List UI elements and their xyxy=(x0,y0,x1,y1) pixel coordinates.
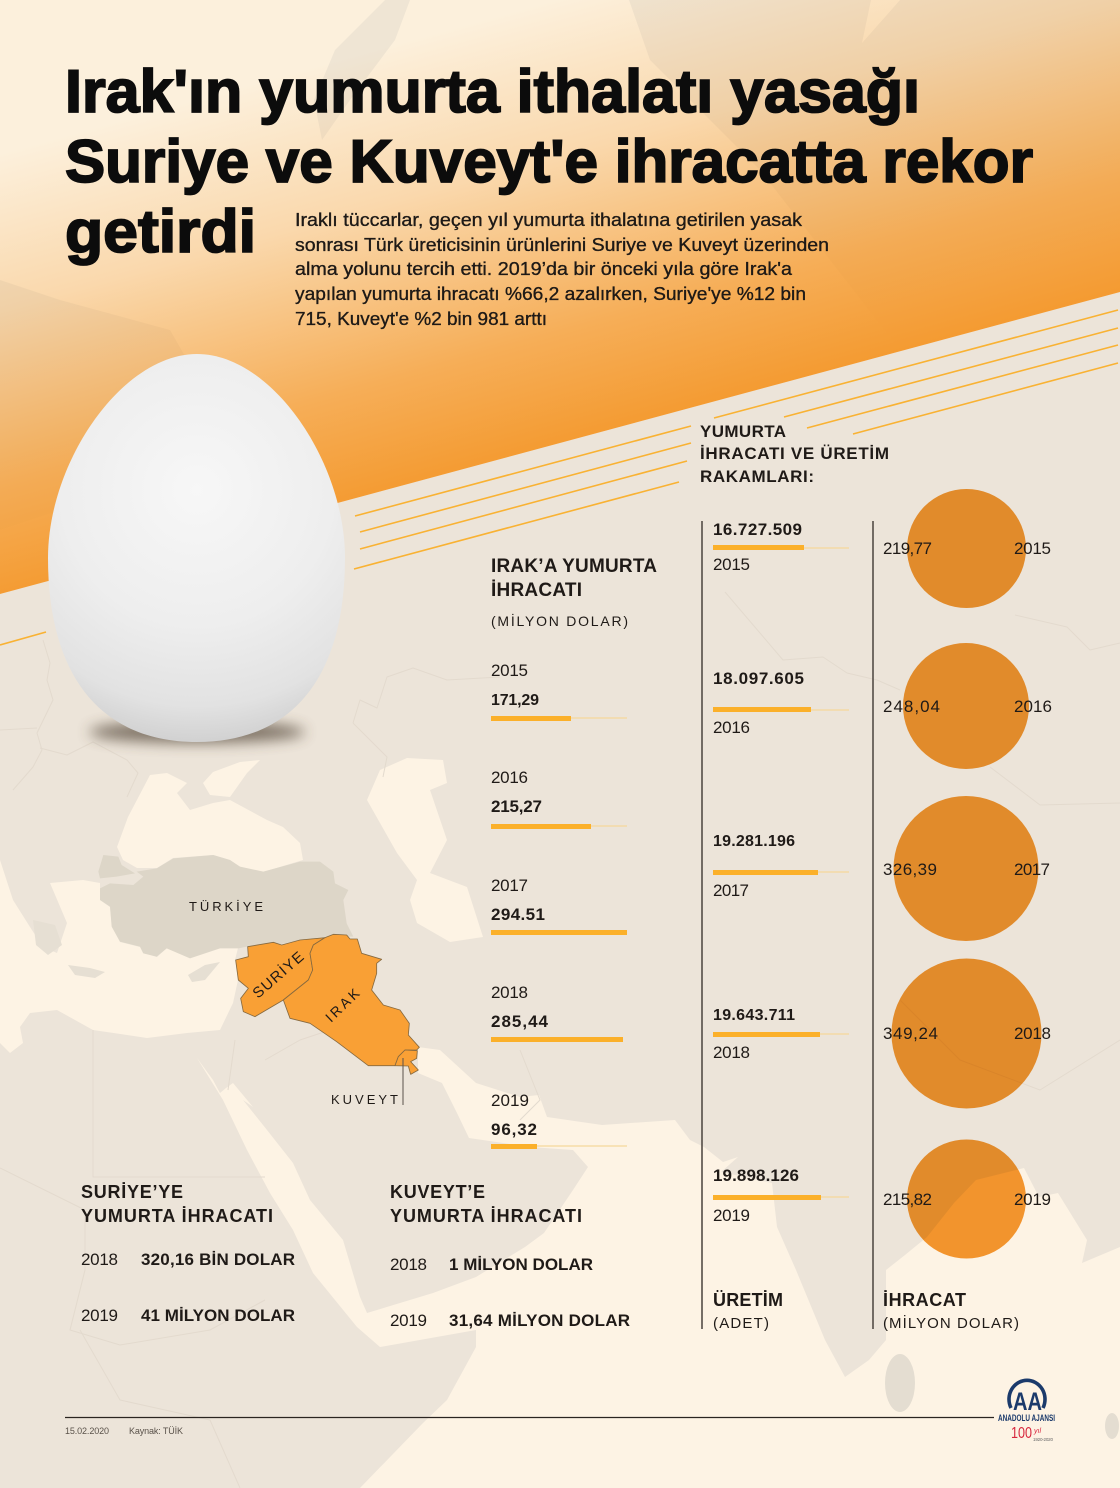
row 2016: 215,27 xyxy=(491,797,542,816)
logo: anadolu ajansi: yıl xyxy=(1033,1428,1041,1435)
production 2017: 19.281.196 xyxy=(713,833,795,850)
footer xyxy=(65,1418,994,1436)
export column labels xyxy=(883,539,1052,1332)
panel: exports to kuwait: 31,64 MİLYON DOLAR xyxy=(449,1311,630,1330)
section heading: export and production xyxy=(700,422,889,486)
sri lanka xyxy=(885,1354,915,1412)
production 2015: 16.727.509 xyxy=(713,520,802,539)
export column labels: (MİLYON DOLAR) xyxy=(883,1314,1019,1332)
section heading: export and production: İHRACATI VE ÜRETİM xyxy=(700,444,889,463)
row 2017: 2017 xyxy=(491,876,528,895)
panel: exports to syria xyxy=(81,1182,295,1325)
logo: anadolu ajansi xyxy=(998,1380,1055,1442)
production 2015 xyxy=(713,520,849,574)
seas xyxy=(0,758,1120,1488)
mediterranean xyxy=(0,860,238,1053)
export column labels: 2016 xyxy=(1014,697,1052,716)
intro text: yapılan yumurta ihracatı %66,2 azalırken, Suriye'ye %12 bin xyxy=(295,284,806,304)
production 2018 xyxy=(713,1007,849,1062)
row 2015: 171,29 xyxy=(491,692,539,709)
footer: Kaynak: TÜİK xyxy=(129,1426,183,1436)
panel: exports to kuwait: KUVEYT’E xyxy=(390,1182,485,1202)
row 2015 xyxy=(491,661,627,721)
panel: exports to syria: 2019 xyxy=(81,1306,118,1325)
row 2017: 294.51 xyxy=(491,905,545,924)
row 2019: 96,32 xyxy=(491,1120,537,1139)
heading: IRAK’A YUMURTA xyxy=(491,556,657,577)
row 2018 xyxy=(491,983,623,1042)
production footer label: (ADET) xyxy=(713,1315,769,1332)
export column labels: 2017 xyxy=(1014,860,1050,879)
export column labels: 2019 xyxy=(1014,1190,1051,1209)
export column labels: 219,77 xyxy=(883,539,932,558)
decorative yellow lines xyxy=(0,310,1118,645)
title xyxy=(65,58,1033,265)
egg illustration xyxy=(48,354,345,743)
intro text: alma yolunu tercih etti. 2019’da bir önceki yıla göre Irak'a xyxy=(295,259,793,279)
row 2018: 2018 xyxy=(491,983,528,1002)
far islands xyxy=(1105,1413,1119,1439)
intro text: 715, Kuveyt'e %2 bin 981 arttı xyxy=(295,309,547,329)
upper sea area xyxy=(0,0,1120,594)
production 2019 xyxy=(713,1166,849,1225)
production 2016: 2016 xyxy=(713,718,750,737)
islands and peninsulas xyxy=(33,920,220,982)
export column labels: 326,39 xyxy=(883,860,937,879)
map highlight: countries xyxy=(98,855,419,1107)
black sea xyxy=(117,773,303,872)
export column labels: 349,24 xyxy=(883,1024,938,1043)
column axes xyxy=(702,521,873,1329)
production 2018: 2018 xyxy=(713,1043,750,1062)
export column labels: 248,04 xyxy=(883,697,940,716)
section heading: export and production: YUMURTA xyxy=(700,422,786,441)
panel: exports to kuwait xyxy=(390,1182,630,1330)
orange diagonal band xyxy=(0,0,1120,594)
orange countries xyxy=(236,934,419,1074)
production 2017: 2017 xyxy=(713,881,749,900)
panel: exports to syria: 41 MİLYON DOLAR xyxy=(141,1306,295,1325)
row 2017 xyxy=(491,876,627,935)
title: Irak'ın yumurta ithalatı yasağı xyxy=(65,58,920,125)
section: irak export: İHRACATI xyxy=(491,580,582,601)
intro text: Iraklı tüccarlar, geçen yıl yumurta ithalatına getirilen yasak xyxy=(295,210,803,230)
production footer label xyxy=(713,1290,783,1332)
production 2015: 2015 xyxy=(713,555,750,574)
label: kuveyt: KUVEYT xyxy=(331,1092,398,1107)
logo: anadolu ajansi: 1920-2020 xyxy=(1033,1437,1053,1442)
panel: exports to kuwait: YUMURTA İHRACATI xyxy=(390,1206,582,1226)
production column xyxy=(713,520,849,1332)
panel: exports to kuwait: 2019 xyxy=(390,1311,427,1330)
production 2017 xyxy=(713,833,849,900)
section: irak export: (MİLYON DOLAR) xyxy=(491,612,628,629)
footer: 15.02.2020 xyxy=(65,1426,109,1436)
label: türkiye: TÜRKİYE xyxy=(189,899,263,914)
intro text xyxy=(295,210,829,329)
panel: exports to kuwait: 2018 xyxy=(390,1255,427,1274)
production 2019: 19.898.126 xyxy=(713,1166,799,1185)
kuveyt pointer xyxy=(402,1058,404,1105)
row 2016 xyxy=(491,768,627,829)
row 2018: 285,44 xyxy=(491,1012,549,1031)
row 2019 xyxy=(491,1091,627,1149)
red sea, gulf and indian ocean xyxy=(197,1047,1120,1488)
logo: anadolu ajansi: AA xyxy=(1013,1388,1042,1416)
panel: exports to syria: SURİYE’YE xyxy=(81,1182,183,1202)
panel: exports to syria: 320,16 BİN DOLAR xyxy=(141,1250,295,1269)
production 2018: 19.643.711 xyxy=(713,1007,795,1024)
caspian xyxy=(367,758,483,942)
title: Suriye ve Kuveyt'e ihracatta rekor xyxy=(65,128,1033,195)
label: suriye: SURİYE xyxy=(249,948,307,1002)
panel: exports to syria: 2018 xyxy=(81,1250,118,1269)
production 2019: 2019 xyxy=(713,1206,750,1225)
export column labels: İHRACAT xyxy=(883,1290,966,1310)
intro text: sonrası Türk üreticisinin ürünlerini Suriye ve Kuveyt üzerinden xyxy=(295,235,829,255)
country borders xyxy=(0,592,1120,1488)
türkiye shape xyxy=(98,855,353,958)
panel: exports to kuwait: 1 MİLYON DOLAR xyxy=(449,1255,593,1274)
export column labels: 2018 xyxy=(1014,1024,1051,1043)
export column labels: 2015 xyxy=(1014,539,1051,558)
export column labels: 215,82 xyxy=(883,1190,932,1209)
section heading: export and production: RAKAMLARI: xyxy=(700,467,814,486)
production 2016: 18.097.605 xyxy=(713,669,804,688)
panel: exports to syria: YUMURTA İHRACATI xyxy=(81,1206,273,1226)
title: getirdi xyxy=(65,198,256,265)
logo: anadolu ajansi: ANADOLU AJANSI xyxy=(998,1413,1055,1424)
logo: anadolu ajansi: 100 xyxy=(1011,1425,1032,1442)
production footer label: ÜRETİM xyxy=(713,1290,783,1310)
section: irak export xyxy=(491,556,657,1149)
circles xyxy=(892,489,1042,1258)
row 2019: 2019 xyxy=(491,1091,529,1110)
row 2016: 2016 xyxy=(491,768,528,787)
production 2016 xyxy=(713,669,849,737)
row 2015: 2015 xyxy=(491,661,528,680)
upper land patches xyxy=(0,0,1120,530)
label: irak: IRAK xyxy=(322,985,363,1025)
